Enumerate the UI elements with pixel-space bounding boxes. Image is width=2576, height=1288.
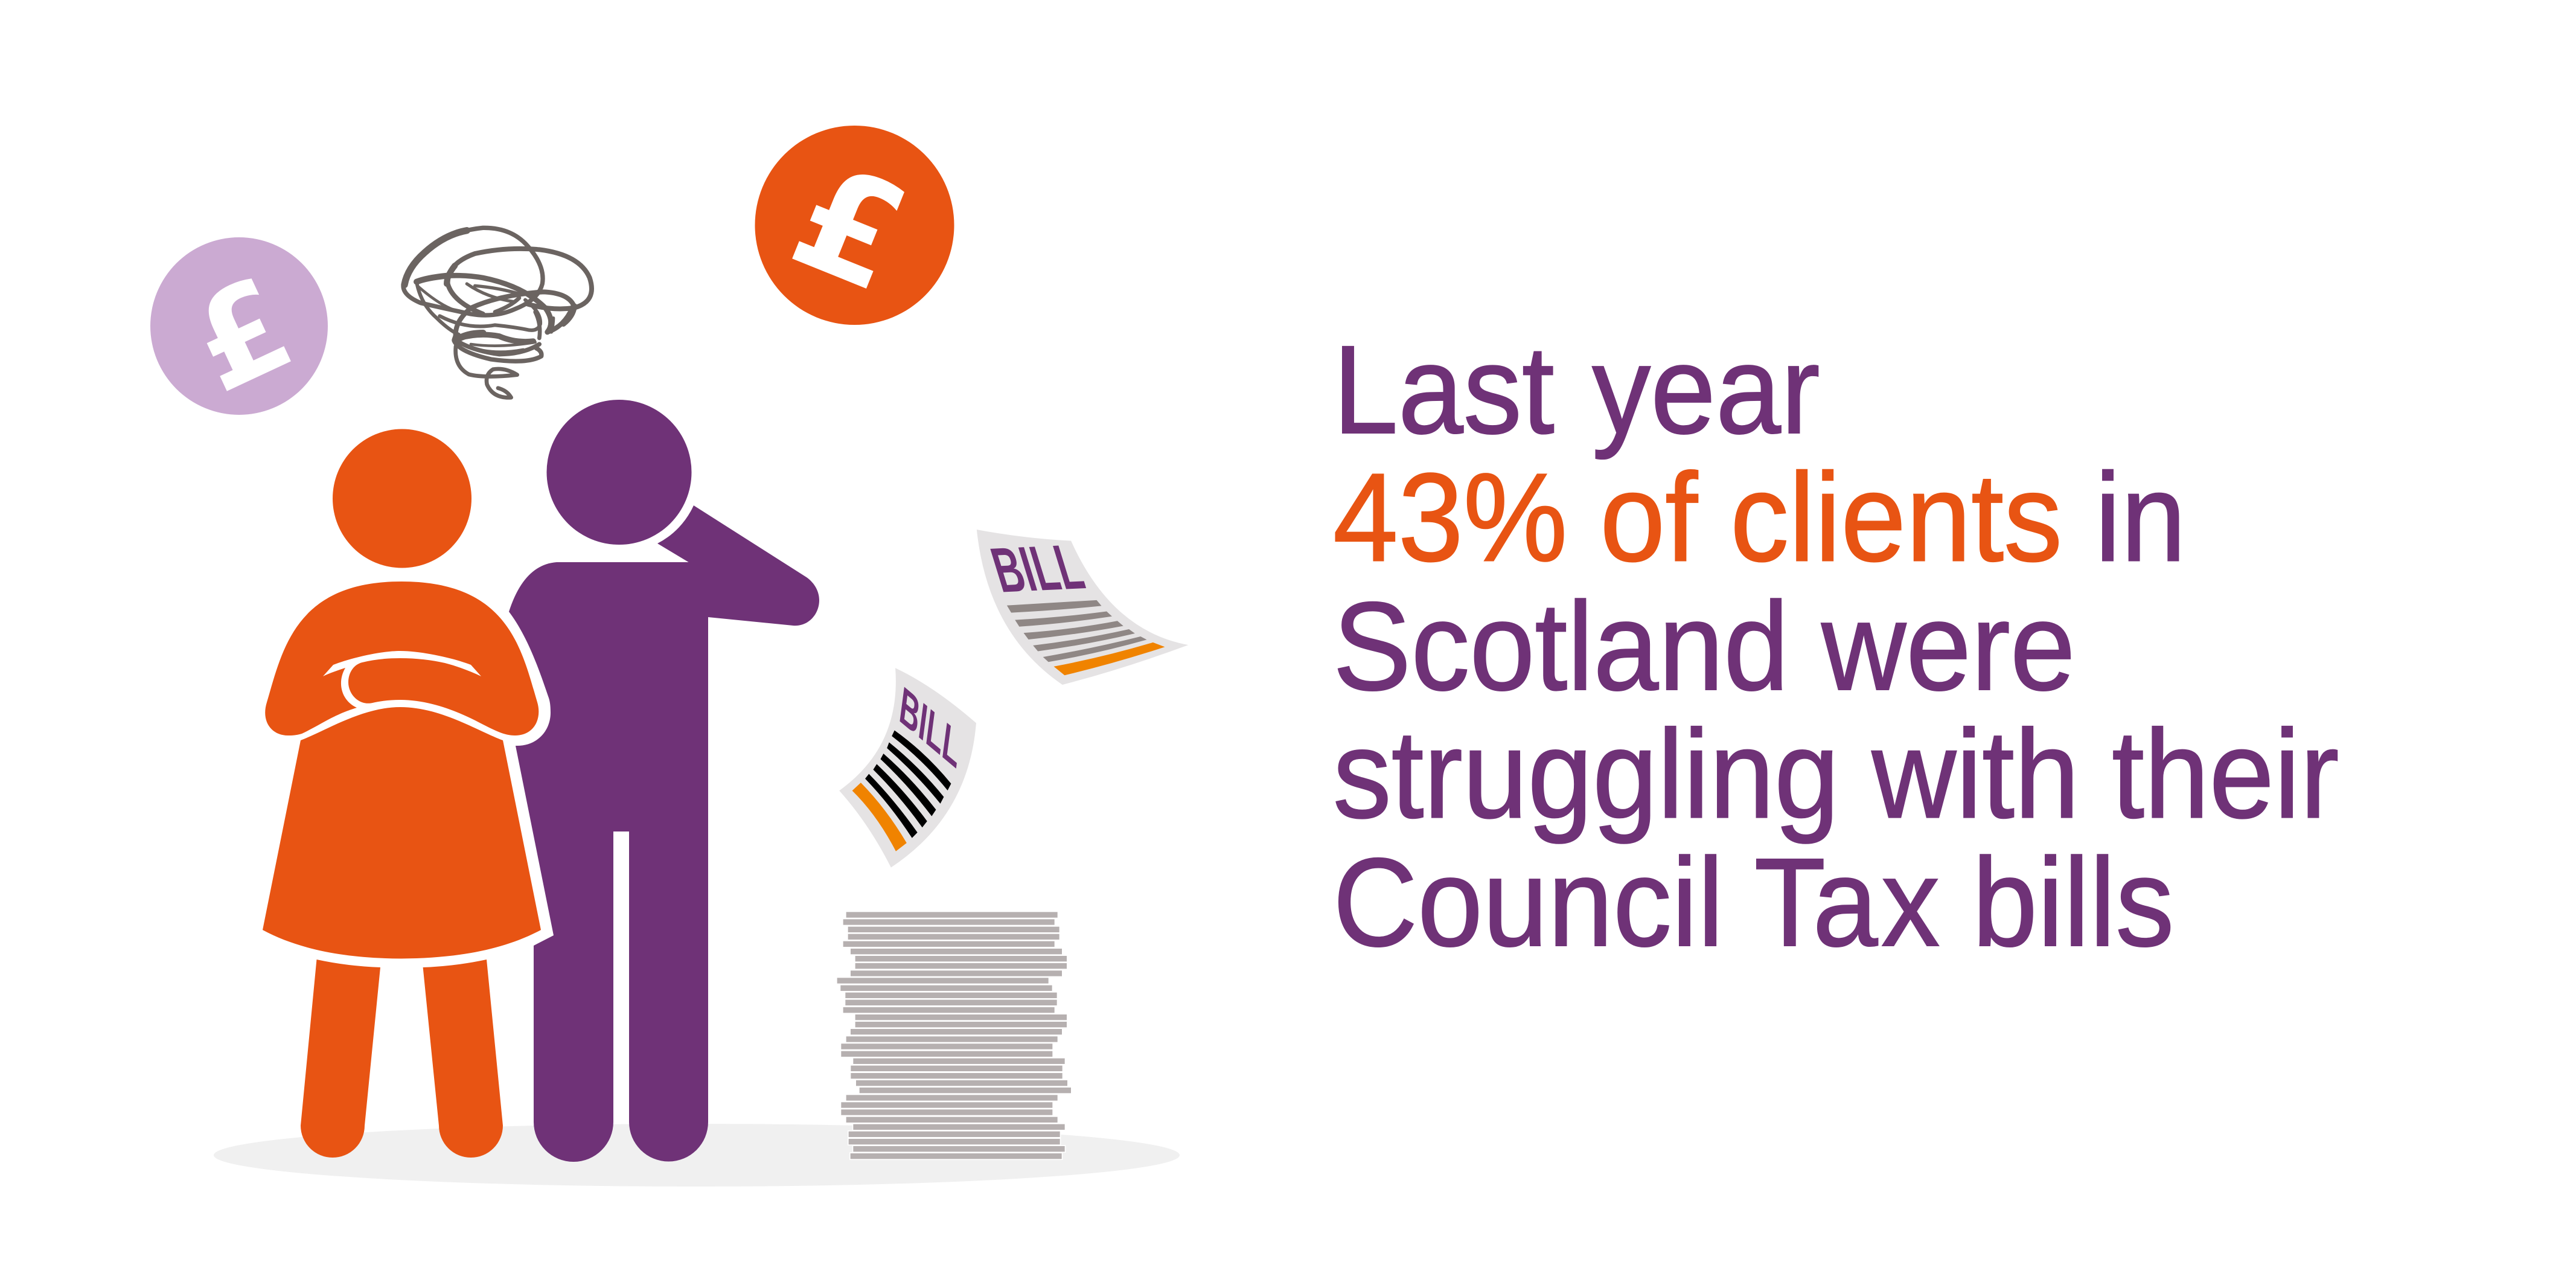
- man body: [509, 505, 819, 1162]
- woman right leg: [423, 960, 503, 1158]
- icon: lower flying bill: BILL: [896, 675, 963, 780]
- icon: orange pound coin: £: [771, 130, 928, 325]
- icon: worry scribble: [403, 228, 592, 397]
- headline text block: [1333, 319, 2339, 972]
- icon: stack of paper: [837, 912, 1071, 1159]
- headline text block: Last year: [1333, 319, 1820, 460]
- ground shadow: [214, 1124, 1180, 1187]
- figure: man in purple: [509, 400, 819, 1162]
- headline text block: struggling with their: [1333, 703, 2339, 844]
- man head: [547, 400, 692, 545]
- woman head: [333, 429, 471, 568]
- woman dress: [263, 707, 541, 959]
- icon: lower flying bill: [839, 668, 976, 868]
- figure: woman in orange: [263, 429, 541, 1158]
- icon: upper flying bill: BILL: [983, 531, 1091, 606]
- woman folded arms and shoulders: [265, 582, 539, 735]
- icon: lilac pound coin: £: [170, 249, 313, 421]
- headline text block: Scotland were: [1333, 576, 2076, 716]
- woman left leg: [301, 960, 380, 1158]
- icon: upper flying bill: [977, 530, 1188, 685]
- headline text block: Council Tax bills: [1333, 832, 2174, 972]
- headline text block: 43% of clients in: [1333, 447, 2186, 588]
